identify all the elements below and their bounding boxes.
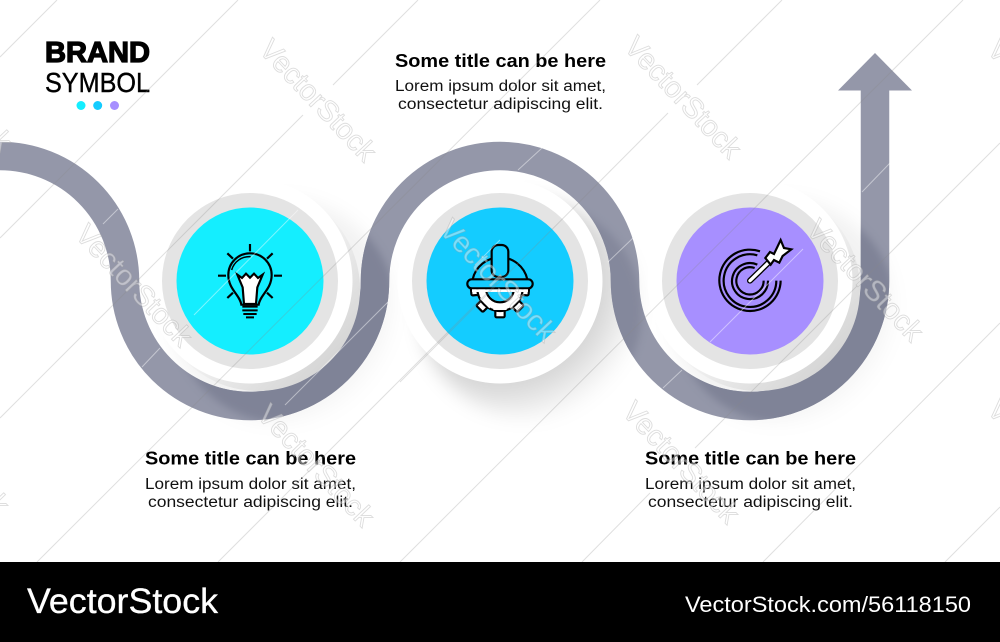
panel: right step disc [648,178,860,391]
watermark: diagonal VectorStock marks: VectorStock [251,399,381,533]
watermark: diagonal VectorStock marks: VectorStock [616,396,746,530]
watermark: diagonal VectorStock marks: VectorStock [800,214,930,348]
watermark: diagonal VectorStock marks: VectorStock [433,214,563,348]
footer bar [0,562,1000,642]
watermark: diagonal VectorStock marks: VectorStock [253,34,383,168]
logo: brand symbol: BRAND [45,37,150,69]
shadow: soft shadow of middle disc [420,199,640,419]
text block: bottom right step: consectetur adipiscing elit. [648,494,853,511]
text block: top step: consectetur adipiscing elit. [398,96,603,113]
shadow: soft shadow of right disc [670,199,894,423]
arrow: winding path with arrowhead [0,53,912,406]
icon: target with arrow [719,240,791,311]
text block: bottom right step [645,448,856,511]
watermark: diagonal VectorStock marks: VectorStock [69,219,199,353]
text block: bottom right step: Some title can be here [645,448,856,468]
text block: bottom right step: Lorem ipsum dolor sit amet, [645,476,856,493]
footer bar: VectorStock [27,582,219,621]
icon: hard hat with gear [467,245,533,317]
shadow: soft shadow of left disc [170,199,394,423]
logo: brand symbol: SYMBOL [45,67,150,98]
watermark: diagonal VectorStock marks: VectorStock [618,31,748,165]
text block: top step: Lorem ipsum dolor sit amet, [395,78,606,95]
panel: middle step disc [398,178,602,384]
text block: bottom left step: Some title can be here [145,448,356,468]
icon: light bulb [218,244,282,317]
logo: brand symbol [45,37,150,110]
panel: left step disc [148,178,360,391]
text block: top step: Some title can be here [395,50,606,71]
text block: bottom left step: consectetur adipiscing elit. [148,494,353,511]
text block: top step [395,50,606,113]
text block: bottom left step [145,448,356,511]
watermark: diagonal VectorStock marks [0,24,1000,533]
footer bar: VectorStock.com/56118150 [685,592,971,617]
text block: bottom left step: Lorem ipsum dolor sit amet, [145,476,356,493]
